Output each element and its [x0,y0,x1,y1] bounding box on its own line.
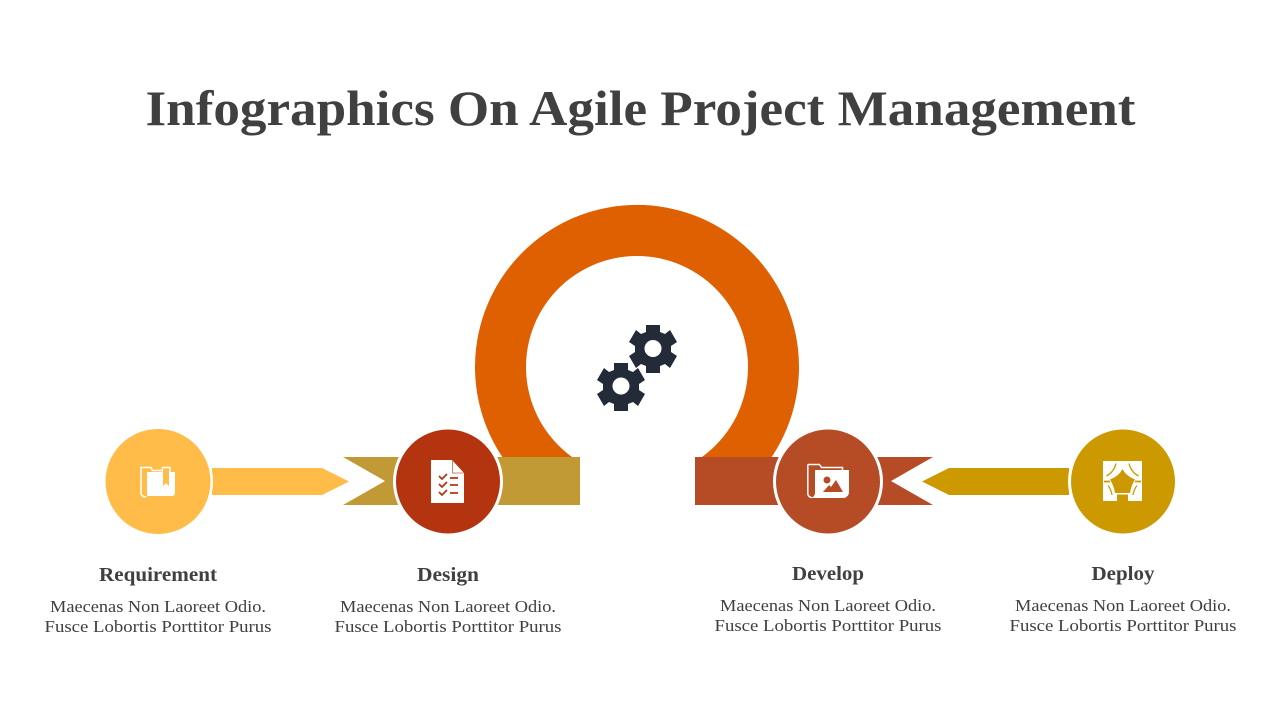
heading: deploy: Deploy [1092,563,1154,585]
heading: develop: Develop [792,563,864,585]
icon: image folder [808,464,849,498]
title: Infographics On Agile Project Management [146,80,1136,136]
arrow: deploy pointer [922,468,1069,495]
description: requirement: Fusce Lobortis Porttitor Purus [44,617,272,636]
arrow: requirement pointer [212,468,349,495]
icon: stage curtains [1103,461,1142,501]
description: design [334,597,562,636]
icon: upper gear [629,325,677,373]
description: requirement: Maecenas Non Laoreet Odio. [50,597,266,616]
arc: central orange ring [475,205,799,460]
ribbon: develop band [695,457,933,505]
ribbon tail left [343,457,400,505]
heading: design: Design [417,564,479,586]
node: develop circle [773,426,883,536]
ribbon: design band [343,457,580,505]
icon: lower gear [597,363,645,411]
description: deploy: Fusce Lobortis Porttitor Purus [1010,616,1236,635]
ribbon band left [695,457,780,505]
icon: gears [597,325,677,411]
icon: folder with bookmark [141,468,175,498]
description: deploy [1010,596,1236,635]
description: design: Maecenas Non Laoreet Odio. [340,597,556,616]
ribbon band right [496,457,580,505]
description: develop [714,596,942,635]
icon: checklist document [431,460,464,503]
description: develop: Maecenas Non Laoreet Odio. [720,596,936,615]
node: design circle [393,426,503,536]
text block: develop [714,563,942,635]
text block: deploy [1010,563,1236,635]
text block: requirement [44,564,272,636]
node: requirement circle [103,426,213,536]
text block: design [334,564,562,636]
description: design: Fusce Lobortis Porttitor Purus [334,617,562,636]
ribbon tail right [876,457,933,505]
node: deploy circle [1068,426,1178,536]
description: develop: Fusce Lobortis Porttitor Purus [714,616,942,635]
description: requirement [44,597,272,636]
description: deploy: Maecenas Non Laoreet Odio. [1015,596,1231,615]
heading: requirement: Requirement [99,564,217,586]
